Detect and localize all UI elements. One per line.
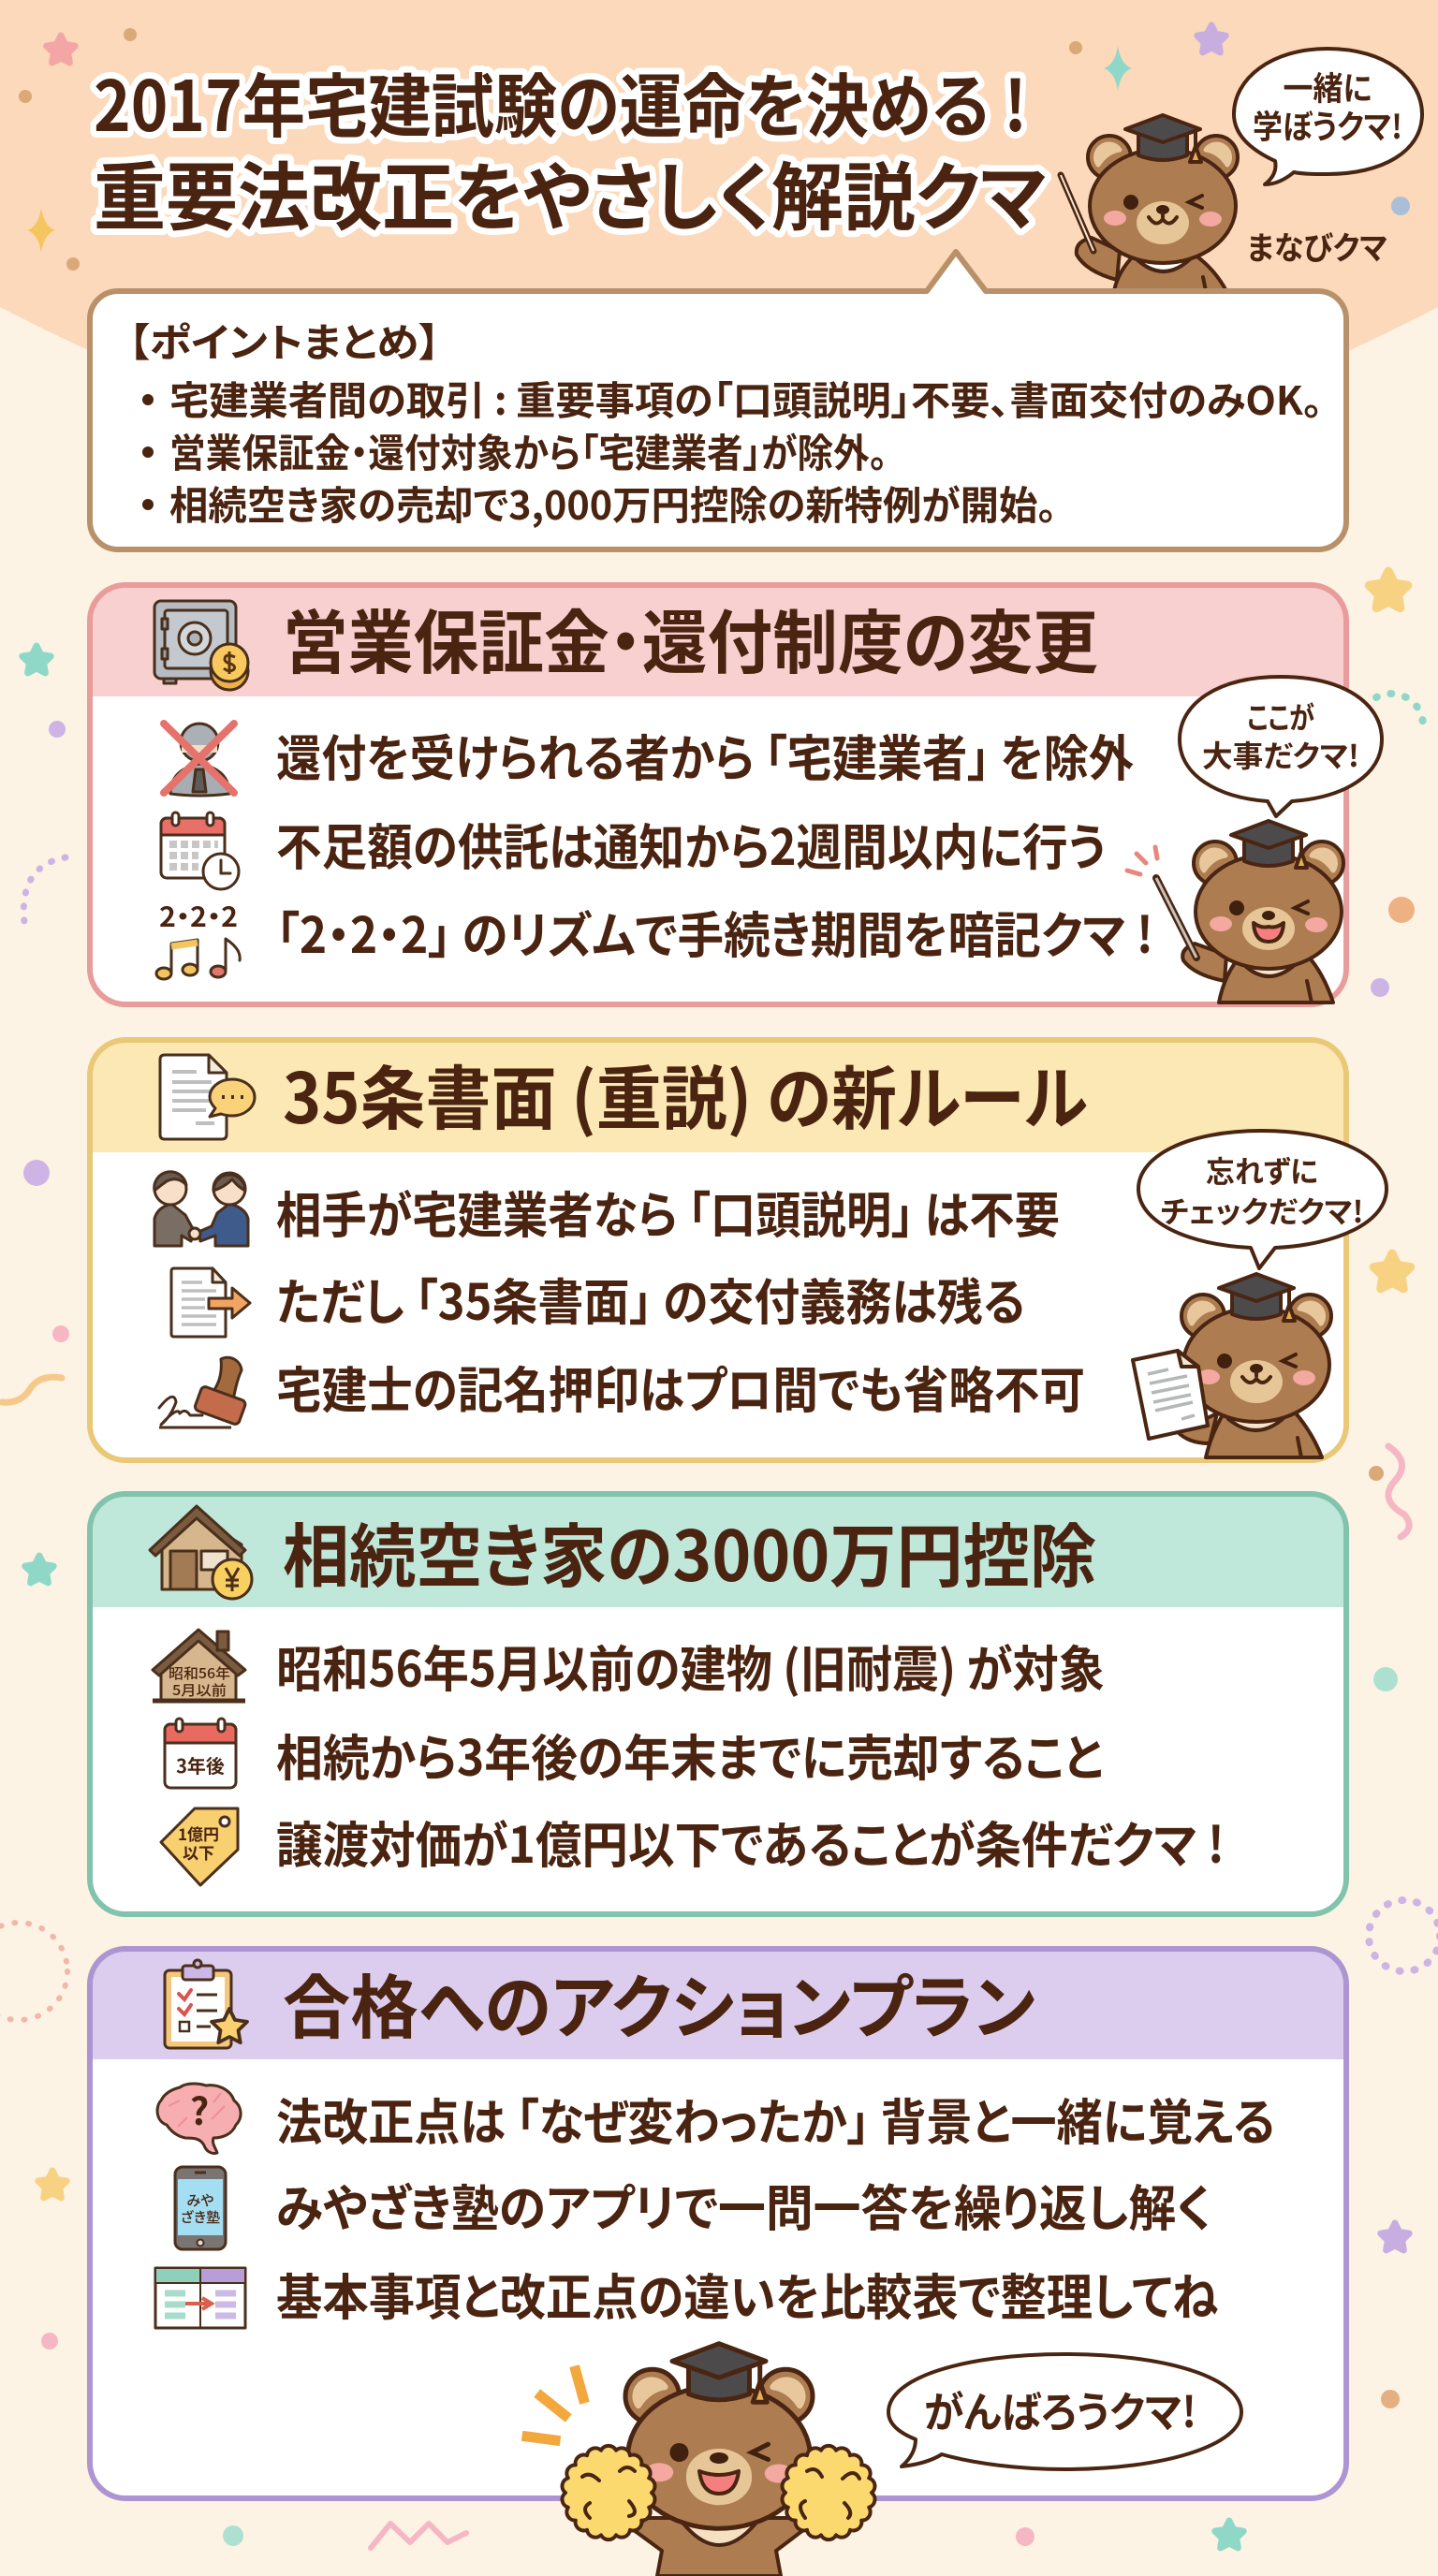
speech bubble: 忘れずにチェックだクマ	[1138, 1131, 1387, 1268]
item 3 icon: comparison table	[155, 2268, 245, 2328]
mascot: cheering bear with pom-poms	[527, 2344, 874, 2576]
item 2 text: ただし 「35条書面」 の交付義務は残る	[276, 1264, 1025, 1335]
speech bubble: がんばろうクマ	[888, 2354, 1241, 2469]
summary bullets: 宅建業者間の取引 : 重要事項の「口頭説明」不要、書面交付のみOK。	[169, 370, 1323, 427]
item 1 icon: old house label: 5月以前	[172, 1680, 227, 1700]
item 3 icon: 2-2-2 rhythm notes: 2・2・2	[159, 896, 238, 935]
panel: 相続空き家の3000万円控除	[90, 1494, 1346, 1914]
item 2 text: みやざき塾のアプリで一問一答を繰り返し解く	[276, 2170, 1211, 2241]
item 2 text: 不足額の供託は通知から2週間以内に行う	[276, 809, 1106, 880]
item 1 icon: brain with question mark: ?	[190, 2082, 209, 2136]
pom-pom left	[563, 2446, 654, 2539]
title: 重要法改正をやさしく解説クマ	[94, 138, 1047, 245]
panel header band	[90, 1040, 1346, 1152]
speech bubble: 一緒に学ぼうクマ	[1234, 49, 1422, 184]
mascot: pointing bear	[1127, 821, 1343, 1003]
item 2 icon: document with arrow	[171, 1268, 250, 1337]
summary bullets	[142, 370, 1323, 532]
item 1 text: 昭和56年5月以前の建物 (旧耐震) が対象	[276, 1631, 1105, 1702]
panel: summary points	[90, 252, 1346, 549]
item 1 text: 法改正点は 「なぜ変わったか」 背景と一緒に覚える	[276, 2084, 1275, 2155]
item 3 text: 譲渡対価が1億円以下であることが条件だクマ !	[276, 1807, 1225, 1878]
item 2 icon: calendar 3 years later	[165, 1719, 236, 1788]
item 3 icon: price tag: 以下	[183, 1840, 214, 1864]
speech bubble: がんばろうクマ: がんばろうクマ!	[924, 2378, 1196, 2439]
mascot: bear holding document	[1133, 1274, 1331, 1457]
item 1 icon: crossed out person	[164, 724, 234, 796]
icon: document with speech bubble	[160, 1055, 255, 1139]
summary heading: 【ポイントまとめ】	[128, 312, 440, 369]
item 2 icon: smartphone app: ざき塾	[181, 2207, 220, 2227]
icon: house with yen coin	[150, 1506, 252, 1599]
item 1 icon: handshake	[154, 1172, 248, 1246]
item 2 text: 相続から3年後の年末までに売却すること	[276, 1720, 1103, 1791]
panel: 営業保証金・還付制度の変更	[90, 585, 1382, 1004]
panel heading: 相続空き家の3000万円控除	[283, 1501, 1096, 1602]
panel header band	[90, 1494, 1346, 1607]
panel heading: 合格へのアクションプラン	[283, 1953, 1035, 2053]
item 2 icon: smartphone app	[175, 2167, 226, 2249]
panel heading: 35条書面 (重説) の新ルール	[283, 1044, 1088, 1144]
item 3 icon: price tag	[161, 1808, 238, 1885]
icon: safe with coin	[154, 601, 248, 690]
summary bullets: 相続空き家の売却で3,000万円控除の新特例が開始。	[169, 475, 1057, 532]
panel: 35条書面(重説)の新ルール	[90, 1040, 1387, 1460]
item 3 icon: 2-2-2 rhythm notes	[156, 896, 240, 979]
speech bubble: 一緒に学ぼうクマ: 一緒に	[1283, 63, 1372, 110]
panel heading: 営業保証金・還付制度の変更	[283, 588, 1098, 688]
item 1 icon: old house label	[153, 1630, 245, 1701]
summary bullets: 営業保証金・還付対象から「宅建業者」が除外。	[169, 422, 888, 479]
panel header band	[90, 585, 1346, 696]
item 1 text: 還付を受けられる者から 「宅建業者」 を除外	[276, 720, 1134, 791]
item 3 text: 宅建士の記名押印はプロ間でも省略不可	[276, 1352, 1085, 1423]
item 2 icon: smartphone app: みや	[187, 2190, 213, 2210]
title	[94, 51, 1047, 245]
item 2 icon: calendar and clock	[161, 812, 239, 889]
item 1 text: 相手が宅建業者なら 「口頭説明」 は不要	[276, 1177, 1060, 1248]
item 2 icon: calendar 3 years later: 3年後	[176, 1751, 225, 1778]
item 1 icon: old house label: 昭和56年	[169, 1663, 230, 1683]
speech bubble: ここが大事だクマ: ここが	[1247, 695, 1314, 738]
speech bubble: ここが大事だクマ: 大事だクマ!	[1202, 733, 1359, 776]
item 3 icon: stamp and signature	[159, 1357, 246, 1427]
mascot name: まなびクマ	[1247, 223, 1387, 269]
speech bubble: 一緒に学ぼうクマ: 学ぼうクマ!	[1253, 101, 1402, 149]
panel: 合格へのアクションプラン	[90, 1949, 1346, 2498]
speech bubble: ここが大事だクマ	[1180, 677, 1382, 816]
speech bubble: 忘れずにチェックだクマ: チェックだクマ!	[1161, 1189, 1363, 1232]
item 3 icon: price tag: 1億円	[178, 1822, 219, 1845]
panel header band	[90, 1949, 1346, 2059]
pom-pom right	[783, 2446, 874, 2539]
top mascot: teaching bear with pointer	[1061, 115, 1238, 291]
item 3 text: 「2・2・2」 のリズムで手続き期間を暗記クマ !	[276, 897, 1153, 968]
speech bubble: 忘れずにチェックだクマ: 忘れずに	[1206, 1149, 1318, 1192]
item 3 text: 基本事項と改正点の違いを比較表で整理してね	[276, 2259, 1218, 2330]
peach header arc	[0, 0, 1438, 494]
title: 2017年宅建試験の運命を決める !	[94, 51, 1027, 152]
icon: clipboard checklist with star	[165, 1960, 247, 2048]
item 1 icon: brain with question mark	[157, 2082, 241, 2154]
